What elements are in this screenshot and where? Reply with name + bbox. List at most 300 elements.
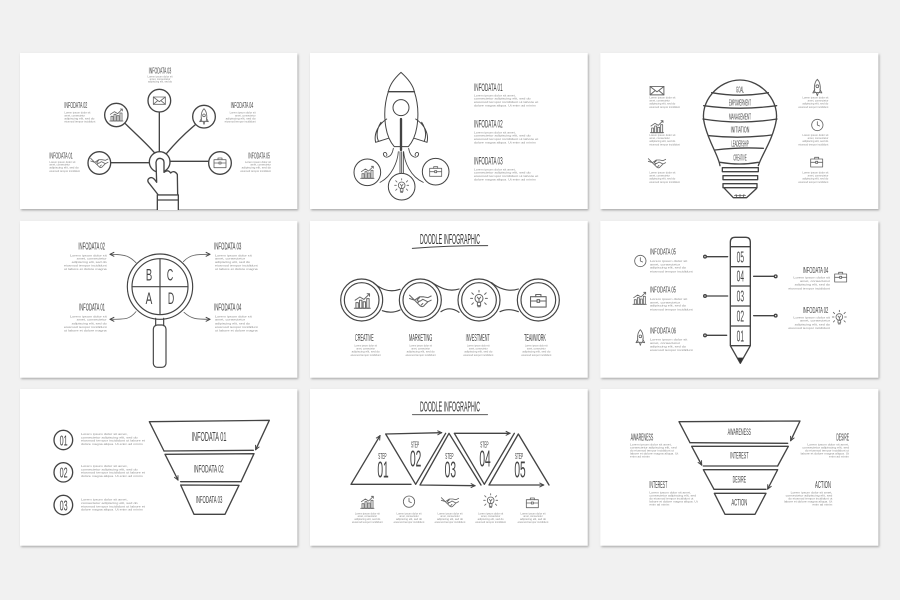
text block: infodata 04: Lorem ipsum dolor sit: [793, 276, 830, 280]
text block: awareness: labore et dolore magna aliqua. Ut: [630, 451, 679, 455]
text block: infodata 05 second: INFODATA 05: [650, 285, 676, 295]
pencil: 03: [737, 289, 744, 306]
text block: infodata 02: eiusmod tempor incididunt: [788, 326, 830, 330]
circle: bulb: [388, 173, 415, 200]
text block: infodata 01: ut labore et dolore magna: [64, 329, 107, 333]
icon: clock: [403, 496, 415, 507]
text block: creative: eiusmod tempor incididunt: [351, 353, 381, 357]
hub with pointing hand: [148, 152, 178, 210]
icon: bulb: [471, 290, 487, 307]
text block: infodata 04: [214, 303, 258, 333]
icon: chart: [361, 496, 374, 508]
text block: teamwork: amet, consectetur: [527, 346, 546, 350]
text block: creative: adipiscing elit, sed do: [352, 350, 380, 354]
text block: action: Lorem ipsum dolor sit amet,: [791, 490, 833, 494]
text block: left 3: eiusmod tempor incididunt: [649, 180, 680, 184]
text block: teamwork: Lorem ipsum dolor sit: [525, 343, 548, 347]
quadrant letters: B: [146, 266, 152, 285]
text block: infodata 01: amet, consectetur: [77, 318, 107, 322]
text block: step 2: adipiscing elit, sed do: [396, 517, 422, 521]
text block: step 2: amet, consectetur: [399, 514, 419, 518]
triangle step 3: 03: [445, 457, 456, 483]
funnel tier 3: [181, 485, 239, 514]
text block: infodata 05: [240, 151, 271, 173]
node: briefcase: [209, 152, 231, 174]
icon: chart: [633, 292, 646, 304]
text block: left 3: [649, 171, 680, 184]
text block: infodata 04: amet, consectetur: [235, 113, 256, 117]
quadrant letters: A: [146, 289, 153, 308]
panel: four linked circles: [310, 221, 588, 378]
text block: left 1: [649, 96, 680, 109]
text block: infodata 01: consectetur adipiscing elit, sed do: [474, 97, 531, 101]
panel: light bulb layers: LEADERSHIP: [731, 139, 749, 148]
text block: infodata 02: dolore magna aliqua. Ut enim ad minim: [474, 140, 536, 144]
text block: infodata 03: adipiscing elit, sed do: [148, 79, 172, 83]
triangle step 2: 02: [410, 446, 421, 472]
text block: infodata 05: Lorem ipsum dolor sit: [245, 160, 271, 164]
text block: marketing: adipiscing elit, sed do: [407, 350, 435, 354]
text block: left 2: [649, 133, 680, 146]
text block: infodata 04: INFODATA 04: [214, 303, 242, 314]
text block: right 2: [798, 133, 829, 146]
panel: light bulb layers: EMPOWERMENT: [729, 98, 751, 107]
triangle step 1: [351, 436, 411, 484]
text block: right 3: Lorem ipsum dolor sit: [802, 171, 828, 175]
funnel tier: awareness: [679, 421, 800, 443]
text block: infodata 03: [147, 66, 173, 83]
panel background: [20, 389, 297, 546]
triangle step 2: STEP: [411, 440, 419, 450]
text block: infodata 02: [64, 100, 95, 124]
text block: infodata 01: eiusmod tempor incididunt: [49, 169, 80, 173]
text block: teamwork: [521, 333, 551, 357]
text block: infodata 02: eiusmod tempor incididunt: [64, 264, 107, 268]
text block: interest: enim ad minim: [649, 503, 670, 507]
panel: four linked circles: DOODLE INFOGRAPHIC: [420, 232, 480, 248]
text block: step 2: [394, 511, 424, 524]
panel background: [20, 221, 297, 378]
text block: step 5: eiusmod tempor incididunt: [518, 520, 548, 524]
text block: step 4: eiusmod tempor incididunt: [475, 520, 506, 524]
text block: right 2: adipiscing elit, sed do: [802, 139, 829, 143]
text block: step 1: amet, consectetur: [358, 514, 377, 518]
text block: 02: consectetur adipiscing elit, sed do: [81, 467, 138, 471]
text block: left 2: adipiscing elit, sed do: [649, 139, 676, 143]
text block: infodata 03: consectetur adipiscing elit, sed do: [474, 171, 531, 175]
panel: magnifying glass: [20, 221, 297, 378]
triangle step 2: [386, 433, 446, 484]
text block: infodata 05: amet, consectetur: [650, 262, 680, 266]
text block: step 3: amet, consectetur: [440, 514, 460, 518]
text block: 02: eiusmod tempor incididunt ut labore et: [81, 471, 145, 475]
text block: right 2: Lorem ipsum dolor sit: [802, 133, 828, 137]
text block: infodata 01: eiusmod tempor incididunt: [64, 325, 107, 329]
text block: infodata 02: Lorem ipsum dolor sit amet,: [474, 130, 516, 134]
panel: hand pressing hub with five nodes: INFODATA 03: [149, 66, 171, 76]
linked circle track: [341, 279, 559, 321]
text block: infodata 05: eiusmod tempor incididunt: [240, 169, 271, 173]
panel: five-step triangles: DOODLE INFOGRAPHIC: [420, 400, 480, 416]
text block: infodata 03: Lorem ipsum dolor sit: [215, 253, 252, 257]
text block: step 1: [352, 511, 383, 524]
text block: right 2: amet, consectetur: [808, 136, 828, 140]
pencil: 05: [737, 249, 744, 266]
text block: infodata 02: [788, 305, 830, 330]
text block: infodata 05: Lorem ipsum dolor sit: [650, 259, 688, 263]
text block: infodata 03: INFODATA 03: [214, 241, 241, 252]
text block: desire: do eiusmod tempor incididunt ut: [805, 448, 849, 452]
magnifier lens: [127, 254, 193, 319]
text block: desire: labore et dolore magna aliqua. Ut: [801, 451, 849, 455]
text block: investment: amet, consectetur: [469, 346, 488, 350]
text block: infodata 05 second: Lorem ipsum dolor sit: [650, 297, 688, 301]
text block: 02: [81, 464, 145, 478]
text block: awareness: [630, 433, 679, 459]
triangle step 4: 04: [479, 446, 491, 472]
funnel tier: interest: [692, 446, 788, 466]
text block: right 3: [798, 171, 829, 184]
numbered circles: [54, 430, 73, 515]
text block: infodata 01: Lorem ipsum dolor sit: [49, 160, 75, 164]
funnel tier 3: INFODATA 03: [196, 495, 222, 506]
text block: infodata 05: [650, 246, 693, 273]
panel background: [20, 53, 297, 209]
text block: infodata 04: [788, 265, 830, 290]
text block: 01: consectetur adipiscing elit, sed do: [81, 435, 138, 439]
text block: step 5: [518, 511, 548, 524]
title: [412, 400, 488, 416]
text block: step 5: adipiscing elit, sed do: [520, 517, 546, 521]
icon: rocket: [636, 330, 645, 345]
text block: left 1: adipiscing elit, sed do: [649, 102, 676, 106]
panel: four linked circles: TEAMWORK: [524, 333, 546, 344]
text block: investment: Lorem ipsum dolor sit: [467, 343, 490, 347]
text block: step 4: adipiscing elit, sed do: [478, 517, 504, 521]
text block: left 1: Lorem ipsum dolor sit: [649, 96, 675, 100]
text block: creative: [351, 333, 381, 357]
text block: infodata 05: adipiscing elit, sed do: [650, 266, 686, 270]
text block: infodata 02: eiusmod tempor incididunt ut labore et: [474, 137, 539, 141]
text block: infodata 02: adipiscing elit, sed do: [72, 260, 107, 264]
text block: teamwork: adipiscing elit, sed do: [522, 350, 551, 354]
text block: step 3: [435, 511, 465, 524]
text block: 03: consectetur adipiscing elit, sed do: [81, 501, 138, 505]
text block: right 3: eiusmod tempor incididunt: [798, 180, 828, 184]
icon: briefcase: [811, 157, 823, 167]
panel background: [600, 221, 878, 378]
text block: desire: [801, 433, 850, 459]
text block: left 3: amet, consectetur: [649, 174, 670, 178]
panel: light bulb layers: [600, 53, 878, 209]
text block: infodata 04: adipiscing elit, sed do: [215, 321, 250, 325]
panel: magnifying glass: INFODATA 02: [78, 241, 105, 252]
text block: step 1: adipiscing elit, sed do: [354, 517, 381, 521]
text block: infodata 02: adipiscing elit, sed do: [64, 116, 95, 120]
text block: left 1: eiusmod tempor incididunt: [649, 105, 680, 109]
text block: awareness: do eiusmod tempor incididunt ut: [630, 448, 674, 452]
triangle step 4: STEP: [480, 440, 489, 450]
text block: right 1: amet, consectetur: [808, 99, 828, 103]
text block: infodata 04: eiusmod tempor incididunt: [225, 120, 256, 124]
text block: infodata 03: [474, 156, 539, 181]
panel: light bulb layers: CREATIVE: [733, 153, 747, 162]
text block: 01: eiusmod tempor incididunt ut labore et: [81, 439, 145, 443]
text block: creative: CREATIVE: [355, 333, 374, 344]
text block: action: do eiusmod tempor incididunt ut: [788, 496, 832, 500]
text block: infodata 01: adipiscing elit, sed do: [72, 321, 107, 325]
text block: infodata 01: [474, 82, 539, 107]
text block: infodata 06: INFODATA 06: [650, 325, 676, 335]
text block: infodata 05: adipiscing elit, sed do: [242, 166, 271, 170]
text block: desire: Lorem ipsum dolor sit amet,: [807, 442, 849, 446]
text block: interest: do eiusmod tempor incididunt ut: [649, 496, 694, 500]
triangle step 1: 01: [377, 457, 389, 483]
text block: infodata 04: Lorem ipsum dolor sit: [230, 111, 256, 115]
text block: infodata 06: [650, 325, 693, 352]
text block: step 2: Lorem ipsum dolor sit: [396, 511, 422, 515]
text block: creative: Lorem ipsum dolor sit: [354, 343, 377, 347]
text block: infodata 01: INFODATA 01: [474, 82, 503, 94]
text block: desire: consectetur adipiscing elit, sed: [802, 445, 849, 449]
panel: AIDA funnel: DESIRE: [836, 433, 849, 444]
text block: infodata 02: INFODATA 02: [474, 119, 503, 131]
text block: infodata 06: adipiscing elit, sed do: [650, 344, 686, 348]
text block: left 1: amet, consectetur: [649, 99, 670, 103]
text block: marketing: Lorem ipsum dolor sit: [409, 343, 432, 347]
text block: action: enim ad minim: [812, 503, 833, 507]
node: handshake: [88, 152, 111, 174]
funnel tier 2: INFODATA 02: [194, 463, 224, 475]
funnel tier: interest: INTEREST: [730, 450, 749, 460]
magnifier handle: [153, 318, 166, 367]
text block: action: [784, 480, 833, 507]
text block: right 3: amet, consectetur: [808, 174, 828, 178]
text block: infodata 03: eiusmod tempor incididunt: [215, 264, 258, 268]
text block: infodata 03: amet, consectetur: [150, 77, 170, 81]
text block: infodata 02: [474, 119, 539, 144]
panel: AIDA funnel: ACTION: [815, 480, 831, 491]
text block: investment: eiusmod tempor incididunt: [463, 353, 493, 357]
text block: infodata 05: amet, consectetur: [250, 163, 271, 167]
node: chart: [105, 103, 128, 127]
text block: teamwork: eiusmod tempor incididunt: [521, 353, 551, 357]
text block: right 2: eiusmod tempor incididunt: [798, 142, 828, 146]
text block: infodata 02: consectetur adipiscing elit, sed do: [474, 134, 531, 138]
panel: light bulb layers: MANAGEMENT: [729, 112, 751, 121]
text block: 03: eiusmod tempor incididunt ut labore et: [81, 504, 145, 508]
connector lines: [111, 112, 209, 163]
connectors: [704, 255, 777, 337]
panel: AIDA funnel: [600, 389, 878, 546]
text block: infodata 05 second: [650, 285, 693, 311]
text block: marketing: [406, 333, 436, 357]
text block: 03: [81, 498, 145, 512]
text block: interest: labore et dolore magna aliqua. Ut: [649, 499, 698, 503]
band labels: [729, 85, 751, 162]
text block: step 2: eiusmod tempor incididunt: [394, 520, 424, 524]
text block: awareness: enim ad minim: [630, 455, 651, 459]
text block: infodata 05 second: amet, consectetur: [650, 300, 680, 304]
text block: infodata 02: amet, consectetur: [64, 113, 85, 117]
text block: awareness: Lorem ipsum dolor sit amet,: [630, 442, 672, 446]
text block: left 2: Lorem ipsum dolor sit: [649, 133, 675, 137]
text block: right 3: adipiscing elit, sed do: [802, 177, 829, 181]
numbered circles: 03: [60, 498, 68, 514]
text block: infodata 01: [49, 151, 80, 173]
icon: rocket: [813, 79, 822, 96]
text block: infodata 04: eiusmod tempor incididunt: [788, 286, 830, 290]
text block: step 4: amet, consectetur: [481, 514, 500, 518]
arrows: [110, 254, 210, 319]
text block: infodata 06: amet, consectetur: [650, 341, 680, 345]
quadrant letters: C: [167, 266, 173, 285]
text block: step 3: adipiscing elit, sed do: [437, 517, 463, 521]
text block: left 3: adipiscing elit, sed do: [649, 177, 676, 181]
icon: clock: [812, 119, 823, 131]
text block: infodata 01: Lorem ipsum dolor sit: [70, 314, 107, 318]
panel: pencil steps: [600, 221, 878, 378]
funnel tier 1: INFODATA 01: [191, 430, 226, 444]
text block: step 3: eiusmod tempor incididunt: [435, 520, 465, 524]
text block: right 1: adipiscing elit, sed do: [802, 102, 829, 106]
text block: marketing: eiusmod tempor incididunt: [406, 353, 436, 357]
text block: right 1: Lorem ipsum dolor sit: [802, 96, 828, 100]
text block: step 4: [475, 511, 506, 524]
text block: step 5: amet, consectetur: [523, 514, 543, 518]
text block: infodata 05 second: eiusmod tempor incididunt: [650, 307, 693, 311]
icon: briefcase: [835, 272, 847, 282]
funnel tier: desire: [703, 470, 778, 489]
text block: infodata 02: Lorem ipsum dolor sit: [793, 315, 830, 319]
numbered circles: 01: [60, 433, 68, 449]
text block: investment: adipiscing elit, sed do: [464, 350, 493, 354]
triangle step 5: 05: [514, 457, 526, 483]
text block: infodata 05: INFODATA 05: [650, 246, 676, 256]
panel: light bulb layers: INITIATION: [731, 126, 749, 135]
text block: infodata 06: eiusmod tempor incididunt: [650, 348, 693, 352]
text block: 02: Lorem ipsum dolor sit amet,: [81, 464, 128, 468]
text block: left 2: amet, consectetur: [649, 136, 670, 140]
text block: creative: amet, consectetur: [356, 346, 375, 350]
text block: infodata 02: ut labore et dolore magna: [64, 267, 107, 271]
text block: infodata 04: amet, consectetur: [800, 279, 830, 283]
text block: infodata 03: dolore magna aliqua. Ut enim ad minim: [474, 177, 536, 181]
panel: magnifying glass: INFODATA 01: [79, 303, 105, 314]
triangle step 1: STEP: [378, 451, 387, 461]
icon: chart: [650, 121, 664, 133]
pencil: [730, 237, 750, 363]
text block: desire: enim ad minim: [829, 455, 850, 459]
panel: four linked circles: INVESTMENT: [466, 333, 490, 344]
text block: marketing: amet, consectetur: [411, 346, 430, 350]
text block: infodata 01: eiusmod tempor incididunt ut labore et: [474, 100, 539, 104]
text block: infodata 06: Lorem ipsum dolor sit: [650, 338, 688, 342]
panel: rocket launch: [310, 53, 588, 209]
pencil: 01: [737, 328, 744, 345]
text block: step 3: Lorem ipsum dolor sit: [437, 511, 463, 515]
text block: investment: [463, 333, 493, 357]
text block: infodata 05: eiusmod tempor incididunt: [650, 269, 693, 273]
title: [412, 232, 488, 248]
text block: infodata 02: amet, consectetur: [800, 319, 830, 323]
text block: infodata 03: Lorem ipsum dolor sit: [147, 75, 173, 79]
icon: briefcase: [531, 294, 546, 307]
text block: infodata 02: INFODATA 02: [64, 100, 87, 110]
text block: step 5: Lorem ipsum dolor sit: [520, 511, 546, 515]
text block: infodata 02: eiusmod tempor incididunt: [64, 120, 95, 124]
panel: hand pressing hub with five nodes: INFODATA 05: [248, 151, 270, 161]
text block: infodata 04: [225, 100, 256, 124]
text block: infodata 03: amet, consectetur: [215, 257, 245, 261]
text block: infodata 01: amet, consectetur: [49, 163, 70, 167]
circle: briefcase: [422, 158, 449, 185]
node: mail: [148, 89, 171, 112]
text block: awareness: consectetur adipiscing elit, sed: [630, 445, 677, 449]
panel background: [310, 53, 588, 209]
funnel tier: action: [714, 493, 766, 514]
text block: infodata 01: INFODATA 01: [49, 151, 73, 161]
text block: infodata 02: Lorem ipsum dolor sit: [70, 253, 107, 257]
text block: infodata 02: amet, consectetur: [77, 257, 107, 261]
text block: infodata 04: INFODATA 04: [803, 265, 828, 275]
panel: four linked circles: MARKETING: [409, 333, 432, 344]
text block: 03: dolore magna aliqua. Ut enim ad minim: [81, 508, 143, 512]
text block: infodata 03: [214, 241, 258, 271]
text block: interest: consectetur adipiscing elit, sed: [649, 493, 696, 497]
panel background: [600, 53, 878, 209]
panel background: [310, 389, 588, 546]
text block: 01: Lorem ipsum dolor sit amet,: [81, 432, 128, 436]
icon: handshake: [648, 159, 666, 168]
text block: infodata 04: eiusmod tempor incididunt: [215, 325, 258, 329]
text block: left 2: eiusmod tempor incididunt: [649, 142, 680, 146]
text block: infodata 02: adipiscing elit, sed do: [795, 322, 830, 326]
text block: infodata 04: adipiscing elit, sed do: [795, 283, 830, 287]
text block: infodata 03: INFODATA 03: [474, 156, 503, 168]
text block: 02: dolore magna aliqua. Ut enim ad minim: [81, 474, 143, 478]
icon: bulb: [832, 310, 846, 324]
triangle step 5: STEP: [515, 451, 523, 461]
bulb screw base: [722, 168, 758, 198]
text block: infodata 03: eiusmod tempor incididunt ut labore et: [474, 174, 539, 178]
funnel tier 1: [149, 420, 269, 451]
panel: five-step triangles: [310, 389, 588, 546]
text block: interest: INTEREST: [649, 480, 667, 491]
text block: infodata 04: amet, consectetur: [215, 318, 245, 322]
text block: 01: [81, 432, 145, 446]
panel background: [310, 221, 588, 378]
text block: awareness: AWARENESS: [631, 433, 653, 444]
text block: step 1: eiusmod tempor incididunt: [352, 520, 383, 524]
icon: handshake: [441, 498, 459, 507]
text block: 01: dolore magna aliqua. Ut enim ad minim: [81, 442, 143, 446]
numbered circles: 02: [60, 466, 68, 482]
text block: infodata 02: Lorem ipsum dolor sit: [64, 111, 90, 115]
panel: three-tier funnel: [20, 389, 297, 546]
funnel tier: desire: DESIRE: [733, 474, 746, 484]
funnel tier: action: ACTION: [731, 498, 747, 508]
text block: right 1: [798, 96, 829, 109]
circle: chart: [354, 159, 381, 186]
band labels: GOAL: [736, 85, 744, 94]
triangle step 3: STEP: [445, 451, 454, 461]
funnel tier 2: [165, 454, 254, 482]
quadrant letters: [146, 266, 174, 308]
icon: clock: [635, 255, 646, 267]
text block: infodata 01: adipiscing elit, sed do: [49, 166, 79, 170]
panel: hand pressing hub with five nodes: [20, 53, 297, 210]
